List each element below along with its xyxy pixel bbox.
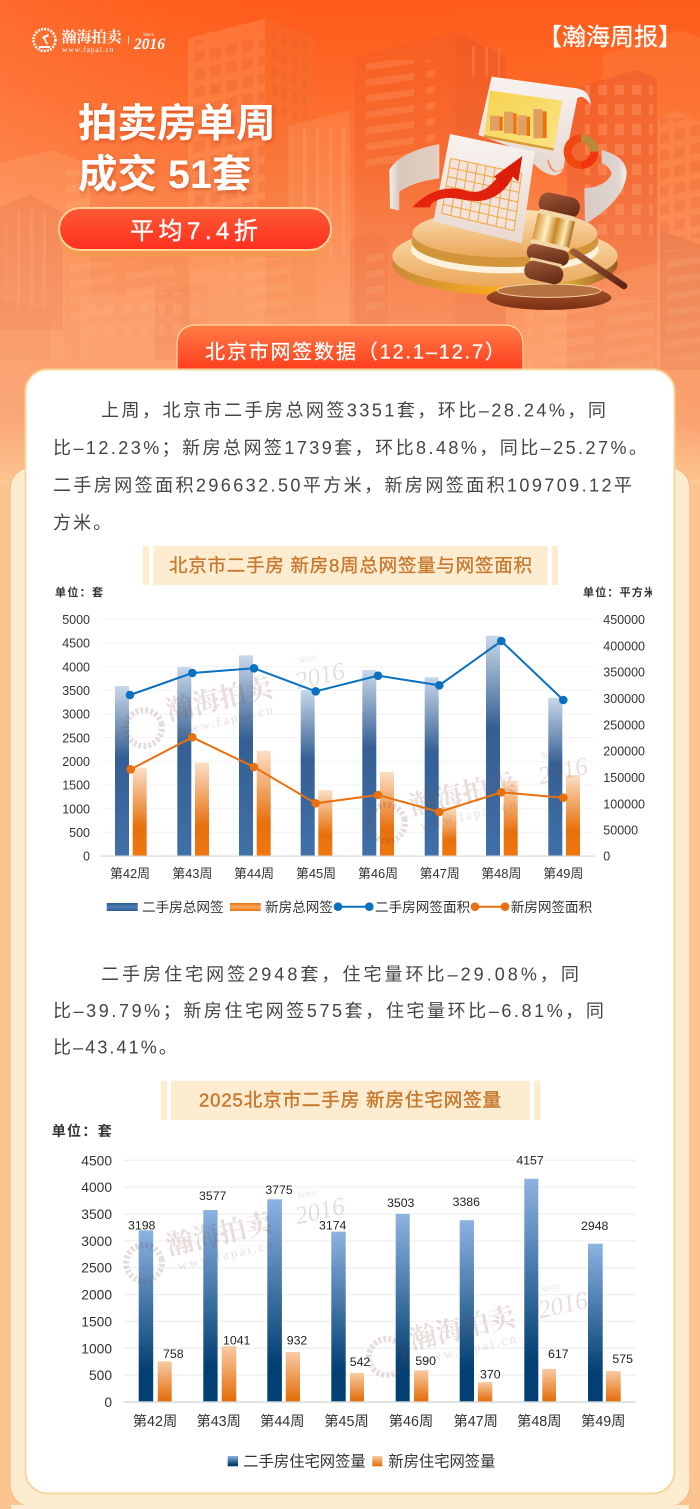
logo wordmark: 瀚海拍卖	[62, 28, 123, 46]
chart 2 y axis: 3000	[81, 1234, 112, 1249]
chart 2 y axis	[81, 1153, 112, 1410]
chart 1 right axis: 150000	[603, 771, 645, 785]
chart 2 value labels: 617	[548, 1347, 569, 1361]
chart 1 title banner: 北京市二手房 新房8周总网签量与网签面积	[169, 555, 532, 576]
chart 1 right axis: 100000	[603, 797, 645, 811]
chart 1 legend: 新房总网签	[265, 899, 333, 915]
section tab: 北京市网签数据（12.1–12.7）	[205, 340, 505, 364]
lower podium	[392, 225, 618, 295]
chart 2 value labels: 758	[163, 1347, 184, 1361]
chart 2 value labels: 3503	[387, 1196, 415, 1210]
chart 2 y axis: 500	[89, 1368, 112, 1383]
chart 2 value labels: 3577	[199, 1189, 227, 1203]
chart 1 left axis: 0	[83, 850, 90, 864]
chart 1 legend: 二手房网签面积	[375, 899, 471, 915]
average discount pill	[59, 208, 331, 256]
watermark	[118, 646, 351, 750]
chart 1 right axis: 350000	[603, 666, 645, 680]
chart 1 right axis: 0	[603, 850, 610, 864]
chart 2 y axis: 2000	[81, 1288, 112, 1303]
background city buildings	[0, 19, 700, 470]
donut icon	[568, 138, 594, 165]
chart 2 y axis: 0	[104, 1395, 112, 1410]
logo	[34, 28, 165, 54]
chart 1 category labels: 第48周	[481, 866, 521, 881]
second paragraph	[53, 964, 606, 1058]
white content card	[26, 370, 674, 1494]
illustration: auction report on podium with gavel	[389, 77, 627, 310]
chart 1 category labels: 第49周	[543, 866, 583, 881]
watermark: Since	[297, 651, 318, 666]
chart 1 category labels: 第46周	[358, 866, 398, 881]
chart 1 category labels: 第44周	[234, 866, 274, 881]
watermark: www.fapai.cn	[176, 1236, 276, 1273]
watermark: www.fapai.cn	[419, 796, 519, 833]
back paper with chart	[478, 77, 591, 171]
section tab	[177, 325, 523, 372]
chart 2 category labels: 第42周	[133, 1412, 177, 1430]
chart 2 category labels: 第47周	[453, 1412, 498, 1430]
chart 1 right unit: 单位：平方米	[583, 585, 655, 599]
logo since: Since	[143, 33, 155, 38]
chart 1 left axis: 500	[69, 826, 90, 840]
chart 1 title banner	[143, 546, 558, 585]
watermark: 瀚海拍卖	[406, 1301, 519, 1355]
right band	[584, 150, 627, 224]
chart 2 value labels	[128, 1154, 633, 1382]
chart 2 legend: 新房住宅网签量	[388, 1454, 495, 1470]
chart 1 left axis: 1500	[62, 779, 90, 793]
chart 1 left unit: 单位：套	[55, 585, 103, 599]
chart 2 unit: 单位：套	[52, 1123, 112, 1139]
intro paragraph: 二手房网签面积296632.50平方米，新房网签面积109709.12平	[53, 476, 634, 496]
intro paragraph: 方米。	[53, 513, 113, 533]
chart 2 legend	[228, 1454, 495, 1470]
watermark: 瀚海拍卖	[163, 672, 276, 726]
chart 1 right axis: 250000	[603, 718, 645, 732]
chart 1 category labels: 第45周	[296, 866, 336, 881]
chart 1 legend: 新房网签面积	[511, 899, 593, 915]
chart 2 category labels	[133, 1412, 626, 1430]
chart 1 left axis: 3000	[62, 708, 90, 722]
chart 1 blue bars	[115, 636, 562, 856]
watermark: 2016	[536, 1287, 591, 1324]
watermark	[361, 741, 594, 845]
chart 2 category labels: 第43周	[196, 1412, 241, 1430]
chart 1 right axis: 50000	[603, 824, 638, 838]
watermark	[118, 1181, 351, 1285]
chart 1 category labels: 第42周	[110, 866, 150, 881]
logo year: 2016	[133, 36, 165, 53]
chart 1 category labels: 第47周	[420, 866, 460, 881]
chart 2 value labels: 1041	[223, 1334, 251, 1348]
chart 1 left axis: 1000	[62, 802, 90, 816]
chart 1 category labels: 第43周	[172, 866, 212, 881]
chart 1 left axis: 4500	[62, 637, 90, 651]
chart 2 y axis: 2500	[81, 1261, 112, 1276]
left band	[389, 144, 439, 211]
watermark: www.fapai.cn	[419, 1330, 519, 1367]
red rising arrow	[412, 156, 522, 207]
watermark: 2016	[536, 753, 591, 790]
chart 2 y axis: 4000	[81, 1180, 112, 1195]
chart 1 right axis: 300000	[603, 692, 645, 706]
cream back panel	[0, 420, 700, 1509]
intro paragraph: 比–12.23%；新房总网签1739套，环比8.48%，同比–25.27%。	[53, 438, 649, 458]
upper podium	[411, 209, 599, 273]
watermark: 瀚海拍卖	[163, 1207, 276, 1261]
watermark	[361, 1275, 594, 1379]
chart 1 right axis: 450000	[603, 613, 645, 627]
chart 2: residential signings	[52, 1123, 636, 1470]
chart 1 left axis: 5000	[62, 613, 90, 627]
header background	[0, 0, 700, 480]
icon: auction emblem	[34, 29, 56, 51]
gavel head	[521, 190, 582, 286]
watermark: Since	[540, 746, 561, 761]
chart 2 title banner: 2025北京市二手房 新房住宅网签量	[199, 1090, 501, 1110]
average discount pill: 平均7.4折	[130, 218, 262, 245]
chart 2 blue bars	[139, 1179, 603, 1402]
chart 2 value labels: 4157	[516, 1154, 544, 1168]
second paragraph: 二手房住宅网签2948套，住宅量环比–29.08%，同	[101, 964, 581, 984]
watermark: Since	[540, 1280, 561, 1295]
chart 2 value labels: 3386	[453, 1195, 480, 1209]
chart 2 value labels: 590	[415, 1354, 436, 1368]
chart 1 orange bars	[133, 751, 580, 856]
intro paragraph	[53, 400, 649, 533]
title: 成交 51套	[78, 153, 251, 197]
intro paragraph: 上周，北京市二手房总网签3351套，环比–28.24%，同	[101, 400, 608, 420]
chart 2 value labels: 3198	[128, 1218, 156, 1232]
watermark: 2016	[293, 1193, 348, 1230]
title: 拍卖房单周	[78, 102, 276, 146]
chart 1: total signings and area	[55, 585, 655, 915]
chart 2 value labels: 3174	[319, 1218, 347, 1232]
chart 2 value labels: 3775	[265, 1183, 293, 1197]
gavel handle	[573, 252, 624, 286]
chart 1 right axis: 400000	[603, 639, 645, 653]
chart 2 y axis: 1500	[81, 1314, 112, 1329]
gavel base	[487, 284, 611, 310]
chart 2 category labels: 第48周	[517, 1412, 562, 1430]
chart 2 y axis: 3500	[81, 1207, 112, 1222]
chart 2 title banner	[161, 1081, 540, 1120]
second paragraph: 比–39.79%；新房住宅网签575套，住宅量环比–6.81%，同	[53, 1001, 606, 1021]
chart 2 value labels: 575	[612, 1352, 633, 1366]
chart 1 left axis	[62, 613, 90, 864]
chart 2 value labels: 932	[287, 1334, 307, 1348]
front paper with grid	[433, 134, 563, 243]
chart 1 legend	[107, 899, 593, 915]
chart 2 value labels: 542	[350, 1355, 370, 1369]
chart 2 y axis: 4500	[81, 1153, 112, 1168]
chart 2 category labels: 第45周	[324, 1412, 369, 1430]
chart 2 value labels: 370	[480, 1368, 501, 1382]
chart 1 left axis: 2500	[62, 731, 90, 745]
chart 1 right axis: 200000	[603, 745, 645, 759]
chart 1 left axis: 3500	[62, 684, 90, 698]
title	[78, 102, 276, 197]
watermark: Since	[297, 1186, 318, 1201]
chart 2 y axis: 1000	[81, 1341, 112, 1356]
chart 2 category labels: 第49周	[581, 1412, 626, 1430]
chart 1 left axis: 2000	[62, 755, 90, 769]
chart 1 legend: 二手房总网签	[142, 899, 224, 915]
second paragraph: 比–43.41%。	[53, 1038, 179, 1058]
chart 2 legend: 二手房住宅网签量	[243, 1454, 366, 1470]
chart 1 orange area line	[126, 733, 568, 816]
watermark: 2016	[293, 658, 348, 695]
chart 1 left axis: 4000	[62, 660, 90, 674]
chart 2 category labels: 第46周	[389, 1412, 433, 1430]
chart 1 blue area line	[126, 637, 568, 704]
logo url: www.fapai.cn	[62, 45, 114, 54]
report tag: 【瀚海周报】	[538, 24, 682, 51]
chart 1 category labels	[110, 866, 583, 881]
watermark: 瀚海拍卖	[406, 767, 519, 821]
chart 1 right axis	[603, 613, 645, 864]
chart 2 category labels: 第44周	[260, 1412, 305, 1430]
watermark: www.fapai.cn	[176, 701, 276, 738]
chart 2 orange bars	[158, 1346, 621, 1402]
chart 2 value labels: 2948	[581, 1219, 609, 1233]
